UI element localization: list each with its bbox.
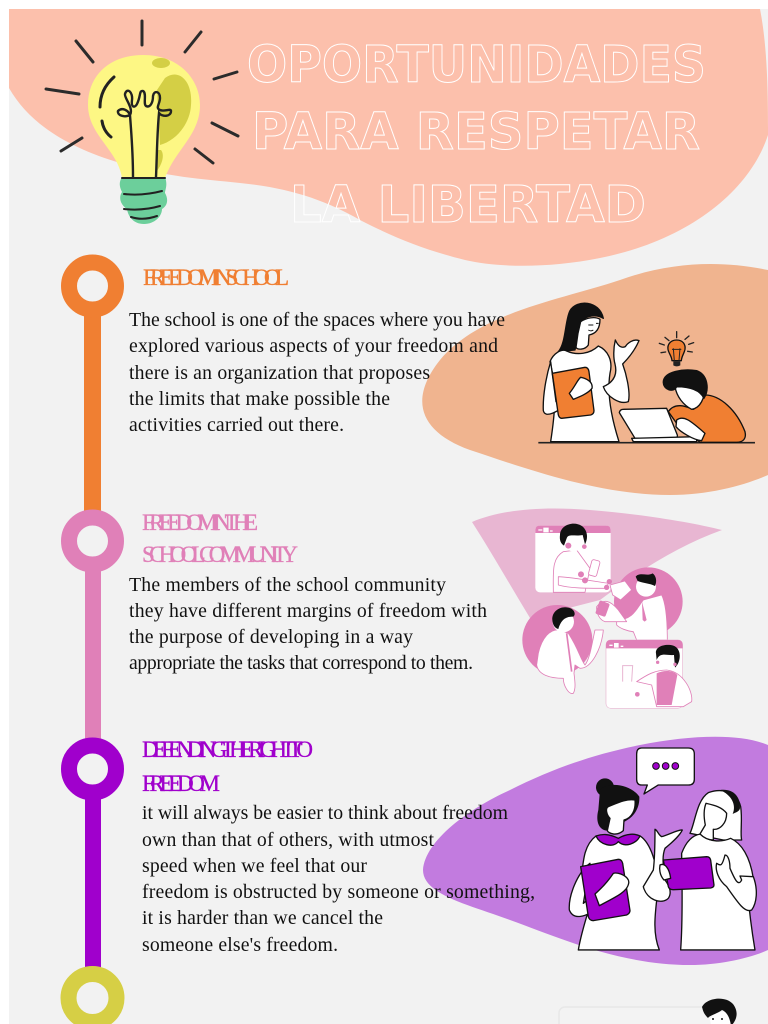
timeline node: school [69, 262, 116, 310]
text block: defending freedom: it will always be easier to think about freedom [142, 802, 509, 824]
man right [595, 573, 667, 640]
timeline node: last [68, 974, 116, 1022]
boy head [675, 387, 705, 409]
pink circles [614, 567, 683, 636]
header blob [9, 9, 768, 266]
boy hand [676, 418, 705, 441]
heading: defending the right to freedom: DEFENDING THE RIGHT TO [142, 737, 313, 762]
text block: school: explored various aspects of your freedom and [129, 335, 498, 357]
envelope [610, 581, 632, 600]
text block: community: appropriate the tasks that correspond to them. [129, 652, 473, 674]
blob: defending freedom section [423, 737, 768, 965]
text block: defending freedom: freedom is obstructed by someone or something, [142, 881, 535, 903]
illustration: teacher and student [538, 303, 755, 443]
title [247, 36, 706, 235]
speech bubble [637, 748, 694, 794]
icon: light bulb [46, 21, 238, 224]
text block: defending freedom: own than that of others, with utmost [142, 829, 434, 851]
title: OPORTUNIDADES [247, 36, 706, 95]
heading: defending the right to freedom [142, 737, 313, 796]
small bulb icon [659, 332, 694, 366]
right woman [681, 790, 756, 950]
text block: defending freedom: it is harder than we cancel the [142, 907, 383, 929]
title: LA LIBERTAD [290, 176, 646, 235]
icon: partial person head [702, 999, 737, 1024]
text block: school: there is an organization that proposes [129, 362, 430, 384]
text block: community [129, 574, 487, 674]
woman body [550, 346, 619, 442]
heading: freedom in the school community [142, 510, 298, 567]
heading: freedom in the school community: SCHOOL COMMUNITY [142, 542, 298, 567]
title: PARA RESPETAR [252, 103, 700, 162]
timeline node: freedom [69, 746, 116, 792]
top window [535, 524, 612, 592]
text block: community: they have different margins of freedom with [129, 600, 487, 622]
ground line [538, 440, 755, 445]
heading: defending the right to freedom: FREEDOM [142, 771, 220, 796]
heading: freedom in the school community: FREEDOM IN THE [142, 510, 258, 535]
boy sweater [668, 395, 745, 442]
tablet [552, 367, 594, 418]
illustration: two women talking [569, 748, 756, 950]
partial card at bottom [559, 1007, 729, 1024]
text block: defending freedom: speed when we feel that our [142, 855, 367, 877]
text block: school: the limits that make possible the [129, 388, 390, 410]
woman right arm [603, 340, 639, 402]
woman left arm [543, 362, 573, 414]
timeline node: community [69, 518, 116, 564]
tablet [663, 857, 714, 890]
text block: community: The members of the school community [129, 574, 446, 596]
timeline [68, 262, 116, 1022]
blob: school section [422, 264, 768, 495]
text block: school: The school is one of the spaces where you have [129, 309, 505, 331]
man left [537, 607, 603, 693]
text block: school: activities carried out there. [129, 414, 344, 436]
heading: freedom in school: FREEDOM IN SCHOOL [143, 265, 289, 290]
text block: defending freedom: someone else's freedom. [142, 934, 338, 956]
text block: school [129, 309, 505, 436]
laptop [619, 408, 677, 438]
woman hair [558, 303, 603, 352]
text block: community: the purpose of developing in a way [129, 626, 413, 648]
left woman [569, 778, 682, 950]
blob: community section [472, 508, 722, 618]
text block: defending freedom [142, 802, 535, 956]
bottom window [606, 640, 692, 708]
illustration: school community [522, 524, 692, 708]
